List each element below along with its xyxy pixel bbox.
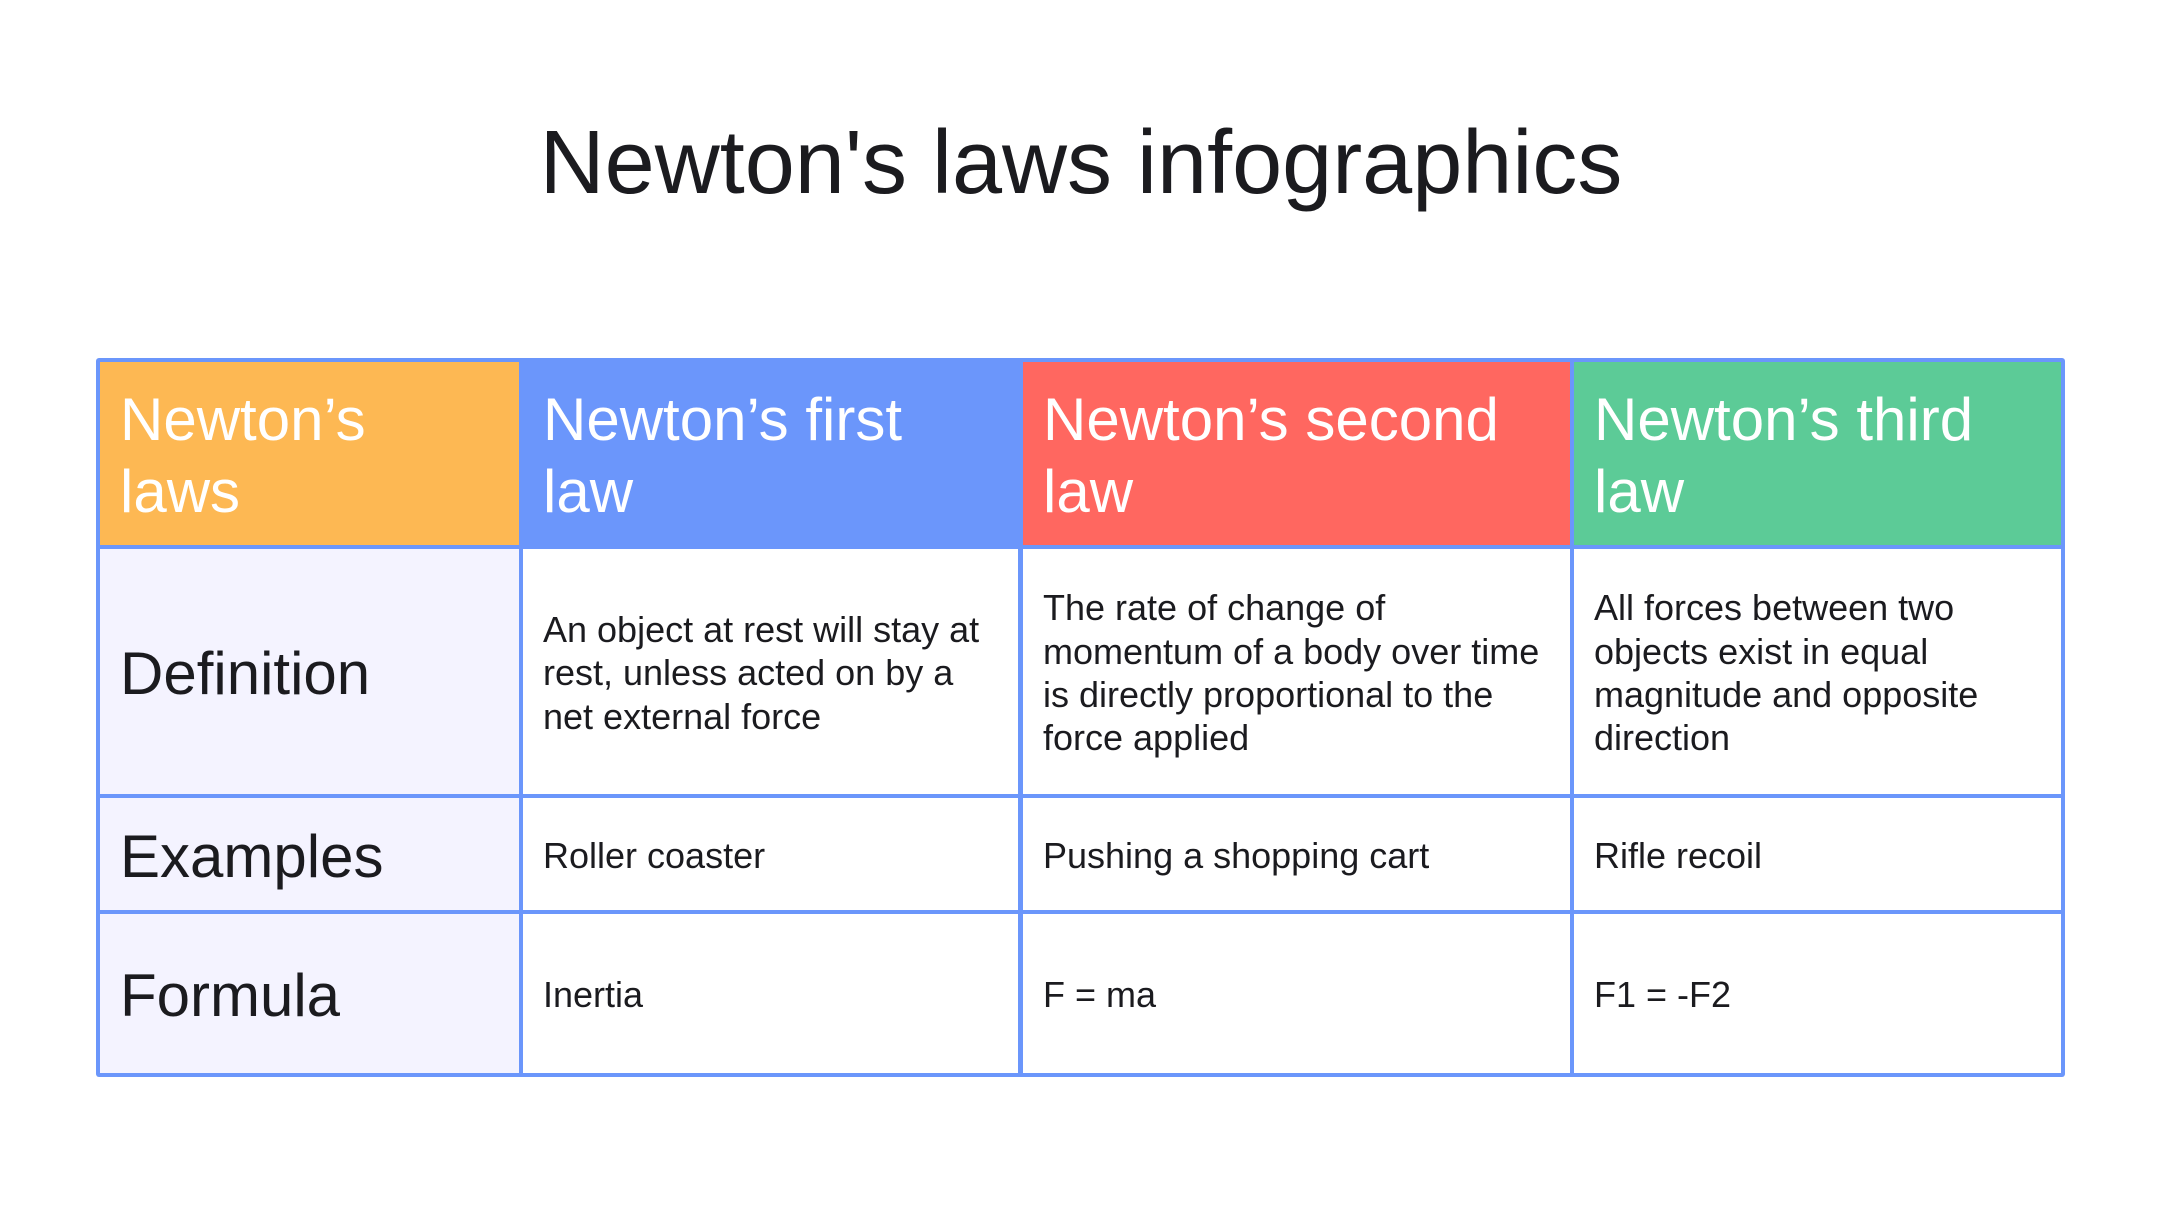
third law definition: magnitude and opposite	[1594, 674, 1978, 715]
header: second law	[1023, 362, 1570, 545]
third law definition: direction	[1594, 717, 1730, 758]
row label: Examples	[100, 798, 518, 910]
second law definition: force applied	[1043, 717, 1249, 758]
first law example: Roller coaster	[543, 835, 765, 876]
header: first law: law	[543, 458, 633, 525]
third law formula: F1 = -F2	[1594, 974, 1731, 1015]
second law formula: F = ma	[1043, 974, 1156, 1015]
header: Newton's laws	[100, 362, 518, 545]
second law formula	[1023, 914, 1570, 1073]
header: first law: Newton’s first	[543, 386, 902, 453]
third law formula	[1574, 914, 2061, 1073]
third law definition	[1574, 549, 2061, 794]
first law definition	[522, 549, 1018, 794]
second law definition	[1023, 549, 1570, 794]
third law example	[1574, 798, 2061, 910]
row label: Definition	[100, 549, 518, 794]
first law formula	[522, 914, 1018, 1073]
header: first law	[522, 358, 1018, 545]
header: Newton's laws: Newton’s	[120, 386, 366, 453]
header: second law: law	[1043, 458, 1133, 525]
first law definition: rest, unless acted on by a	[543, 652, 953, 693]
header: third law: law	[1594, 458, 1684, 525]
row label: Definition: Definition	[120, 640, 370, 707]
second law example: Pushing a shopping cart	[1043, 835, 1429, 876]
second law example	[1023, 798, 1570, 910]
third law example: Rifle recoil	[1594, 835, 1762, 876]
first law definition: An object at rest will stay at	[543, 609, 979, 650]
header: Newton's laws: laws	[120, 458, 240, 525]
third law definition: All forces between two	[1594, 587, 1954, 628]
header: third law	[1574, 362, 2061, 545]
header: second law: Newton’s second	[1043, 386, 1499, 453]
second law definition: The rate of change of	[1043, 587, 1385, 628]
second law definition: is directly proportional to the	[1043, 674, 1493, 715]
row label: Formula	[100, 914, 518, 1073]
third law definition: objects exist in equal	[1594, 631, 1928, 672]
title: Newton's laws infographics	[540, 113, 1622, 213]
comparison table	[96, 358, 2065, 1077]
first law example	[522, 798, 1018, 910]
first law formula: Inertia	[543, 974, 643, 1015]
header: third law: Newton’s third	[1594, 386, 1973, 453]
second law definition: momentum of a body over time	[1043, 631, 1539, 672]
row label: Formula: Formula	[120, 962, 340, 1029]
first law definition: net external force	[543, 696, 821, 737]
row label: Examples: Examples	[120, 822, 383, 890]
